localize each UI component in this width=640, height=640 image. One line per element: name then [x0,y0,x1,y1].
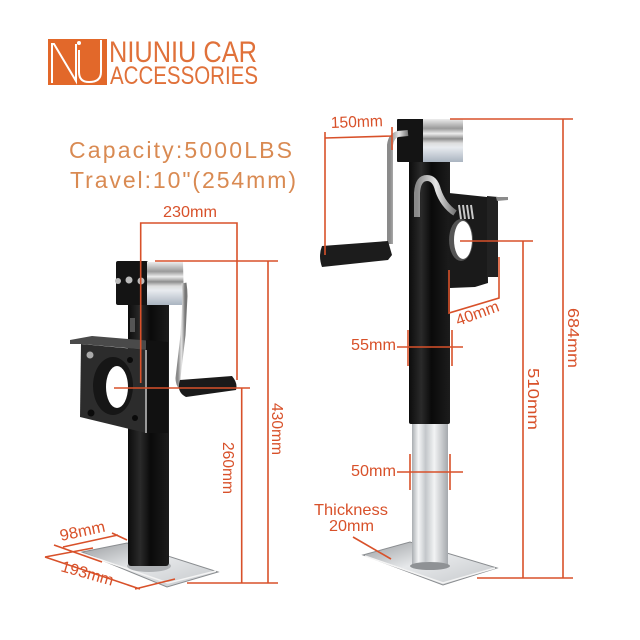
crank handle [320,241,392,267]
right jack dimension labels: 55mm [351,337,396,354]
gear box [147,262,184,305]
weld ring [410,562,450,570]
right jack dimension labels: 20mm [329,518,374,535]
top bracket [115,261,148,332]
left jack dimension labels: 230mm [163,204,217,221]
left jack dimension labels: 430mm [268,403,285,455]
right jack dimension labels [314,113,581,535]
outer tube [128,300,169,566]
right jack dimension lines [325,119,573,578]
right jack dimension labels: 40mm [454,298,502,330]
latch hook [417,178,455,217]
logo wordmark: ACCESSORIES [110,62,258,90]
right jack photo [320,119,508,585]
right jack dimension labels: 510mm [524,368,541,430]
foot plate [363,542,497,585]
left jack dimension labels: 98mm [58,519,107,545]
crank arm [390,133,408,244]
mounting bracket [449,193,508,288]
inner silver tube [412,420,448,566]
top bracket [397,119,425,162]
logo [48,36,258,90]
foot plate [82,543,218,587]
mounting plate [70,336,168,433]
spring [459,205,473,219]
right jack dimension labels: Thickness [314,502,388,519]
gear box [423,119,463,162]
logo mark [48,39,107,85]
left jack dimension labels: 193mm [59,559,115,590]
left jack dimension lines [45,223,278,589]
capacity and travel specs [69,137,296,193]
capacity and travel specs: Travel:10"(254mm) [70,167,296,193]
weld ring [127,560,171,572]
right jack dimension labels: 50mm [351,463,396,480]
crank arm [178,283,185,390]
right jack dimension labels: 150mm [331,113,383,132]
right jack dimension labels: 684mm [564,308,581,368]
left jack dimension labels: 260mm [219,442,236,494]
outer black tube [409,160,450,424]
crank handle [179,376,236,397]
left jack photo [70,261,236,587]
logo wordmark: NIUNIU CAR [109,36,257,69]
capacity and travel specs: Capacity:5000LBS [69,137,292,163]
left jack dimension labels [58,204,285,590]
logo wordmark [109,36,258,90]
